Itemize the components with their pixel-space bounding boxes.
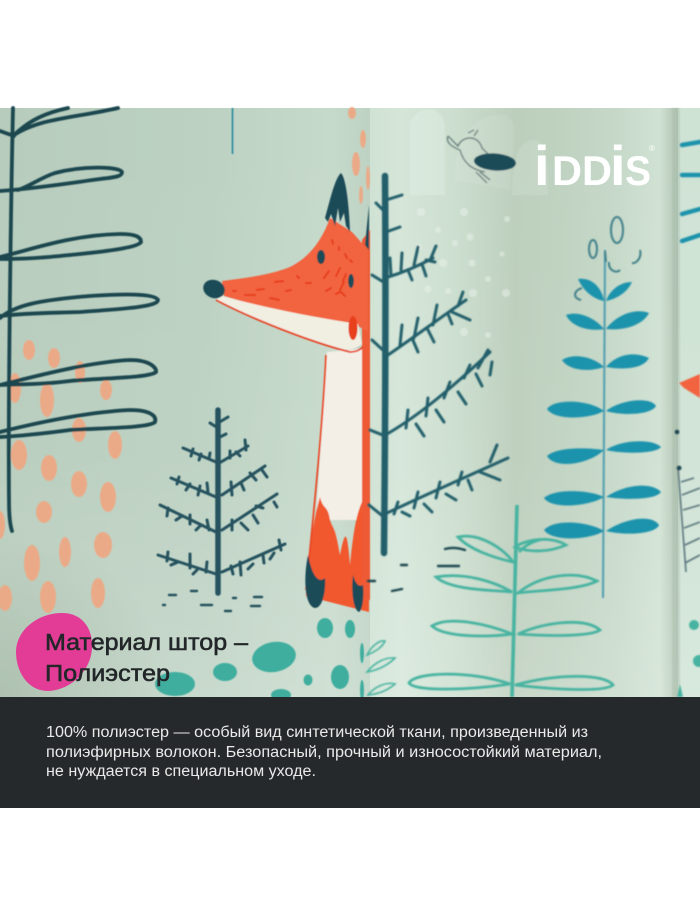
teal dots [155, 618, 364, 701]
partial fox [679, 374, 700, 398]
fox side fur [362, 230, 370, 600]
faint white hills [410, 109, 548, 195]
fox paw right [352, 575, 363, 612]
small tree fragment [674, 430, 700, 572]
blue plant leaves [544, 279, 661, 538]
logo: iDDiS: i [610, 134, 626, 197]
dark dashes [368, 548, 465, 591]
dark text band [0, 697, 700, 808]
muzzle outline [216, 300, 363, 352]
fox fur [306, 495, 369, 612]
small pine tree [158, 410, 285, 593]
center fold pattern [367, 109, 661, 697]
left fold pattern [0, 107, 370, 701]
fox muzzle [216, 296, 362, 350]
curtain photo [0, 107, 700, 701]
description text: полиэфирных волокон. Безопасный, прочный и износостойкий материал, [46, 744, 602, 761]
fox paw left [305, 555, 325, 608]
heading [45, 629, 248, 686]
blue plant seed rings [575, 217, 640, 300]
thin teal line [232, 108, 234, 154]
blue plant [544, 217, 661, 598]
fox outline [306, 355, 326, 590]
heading: Полиэстер [45, 660, 170, 686]
fox cheek [348, 316, 358, 340]
logo: iDDiS [534, 134, 655, 197]
fox eyes [317, 250, 354, 288]
description text: не нуждается в специальном уходе. [46, 763, 316, 780]
fox second ear [365, 205, 369, 250]
dark fern [0, 108, 158, 531]
curtain fabric background [0, 108, 700, 697]
description text: 100% полиэстер — особый вид синтетической ткани, произведенный из [46, 724, 588, 741]
logo: iDDiS: i [534, 134, 550, 197]
fox body [316, 348, 366, 520]
fox illustration [201, 173, 370, 612]
heading: Материал штор – [45, 629, 248, 655]
snow dots [416, 208, 510, 338]
right fold pattern [672, 108, 700, 697]
fold shadow [672, 108, 680, 697]
logo: iDDiS: S [625, 147, 651, 194]
large dark tree [369, 176, 508, 553]
teal stripes [682, 142, 700, 241]
logo: iDDiS: D [552, 147, 582, 194]
peach dots [0, 107, 370, 613]
logo: iDDiS: D [582, 147, 612, 194]
description text [46, 724, 602, 780]
seafoam plant [409, 505, 613, 697]
fox head [222, 218, 368, 332]
pink blob [16, 613, 92, 691]
fox markings [233, 240, 352, 300]
bird [447, 130, 517, 183]
fox ear [325, 173, 350, 232]
bird wing [473, 152, 517, 172]
ground dashes [163, 591, 262, 611]
logo: iDDiS: ® [649, 144, 655, 153]
fox nose [201, 277, 227, 301]
small seam leaves [367, 641, 395, 695]
right teal dots [677, 620, 700, 697]
